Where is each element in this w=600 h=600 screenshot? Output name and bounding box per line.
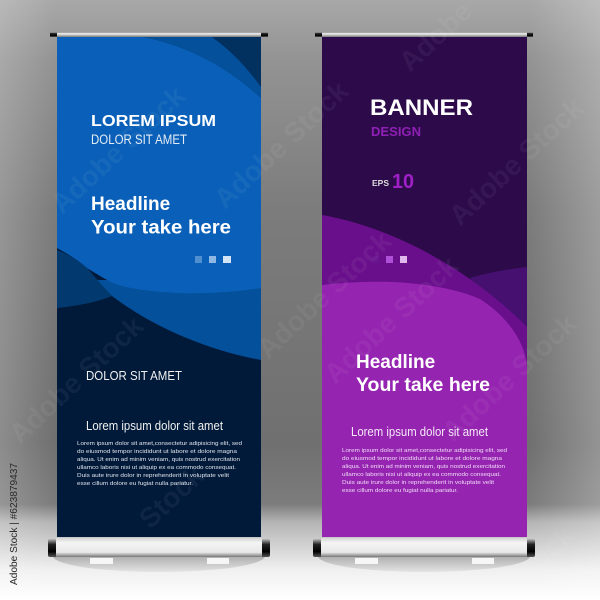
heading: banner: BANNER (370, 95, 473, 120)
body paragraph: esse cillum dolore eu fugiat nulla pariatur. (77, 481, 193, 487)
body paragraph: do eiusmod tempor incididunt ut labore et dolore magna (77, 449, 238, 455)
subheading: design: DESIGN (371, 124, 421, 139)
stock watermarks: Stock (503, 519, 580, 594)
body paragraph: do eiusmod tempor incididunt ut labore et dolore magna (342, 456, 503, 462)
blue banner artwork (57, 37, 261, 537)
eps label: EPS (372, 178, 389, 188)
three square dots (372, 256, 407, 263)
vertical stock id: Adobe Stock | #623879437 (8, 463, 20, 585)
panel: blue roll-up banner (48, 32, 270, 572)
panel: purple roll-up banner (313, 32, 535, 572)
body paragraph: Lorem ipsum dolor sit amet,consectetur adipisicing elit, sed (77, 441, 242, 447)
blue banner top rail (50, 32, 268, 37)
body paragraph: Lorem ipsum dolor sit amet,consectetur adipisicing elit, sed (342, 448, 507, 454)
body paragraph: aliqua. Ut enim ad minim veniam, quis nostrud exercitation (77, 457, 240, 463)
three square dots (195, 256, 231, 263)
stock watermarks: Adobe Stock (443, 92, 590, 231)
purple stand base shadow (318, 540, 530, 572)
headline text: Your take here (356, 375, 490, 396)
stock watermarks: Adobe Stock (318, 250, 465, 389)
stock watermarks: Stock (133, 459, 210, 534)
purple banner top rail (315, 32, 533, 37)
headline text (356, 352, 490, 396)
body paragraph (77, 441, 242, 487)
subheading: lorem ipsum dolor sit amet: Lorem ipsum dolor sit amet (86, 419, 223, 433)
stock watermarks: Adobe Stock (208, 75, 355, 214)
body paragraph: ullamco laboris nisi ut aliquip ex ea commodo consequat. (342, 472, 501, 478)
body paragraph (342, 448, 507, 494)
purple banner artwork (322, 37, 527, 537)
stock watermarks: Adobe Stock (251, 225, 398, 364)
body paragraph: Duis aute irure dolor in reprehenderit in voluptate velit (77, 473, 229, 479)
body paragraph: aliqua. Ut enim ad minim veniam, quis nostrud exercitation (342, 464, 505, 470)
stock watermarks: Adobe Stock (3, 310, 150, 449)
headline text: Your take here (91, 218, 231, 238)
stock watermarks: Adobe Stock (45, 80, 192, 219)
body paragraph: ullamco laboris nisi ut aliquip ex ea commodo consequat. (77, 465, 236, 471)
body paragraph: Duis aute irure dolor in reprehenderit in voluptate velit (342, 480, 494, 486)
banner stand base shadow (53, 540, 265, 572)
headline text: Headline (91, 194, 170, 215)
purple banner bottom stand (313, 538, 535, 564)
subheading: lorem ipsum dolor sit amet: Lorem ipsum dolor sit amet (351, 425, 488, 439)
stock watermarks: Adobe Stock (436, 308, 583, 447)
blue banner bottom stand (48, 538, 270, 564)
lower label: dolor sit amet: DOLOR SIT AMET (86, 368, 182, 383)
headline text (91, 194, 231, 238)
eps number: 10 (392, 171, 414, 193)
headline text: Headline (356, 352, 435, 373)
heading: lorem ipsum: LOREM IPSUM (91, 113, 216, 130)
body paragraph: esse cillum dolore eu fugiat nulla pariatur. (342, 488, 458, 494)
subheading: dolor sit amet: DOLOR SIT AMET (91, 132, 187, 147)
